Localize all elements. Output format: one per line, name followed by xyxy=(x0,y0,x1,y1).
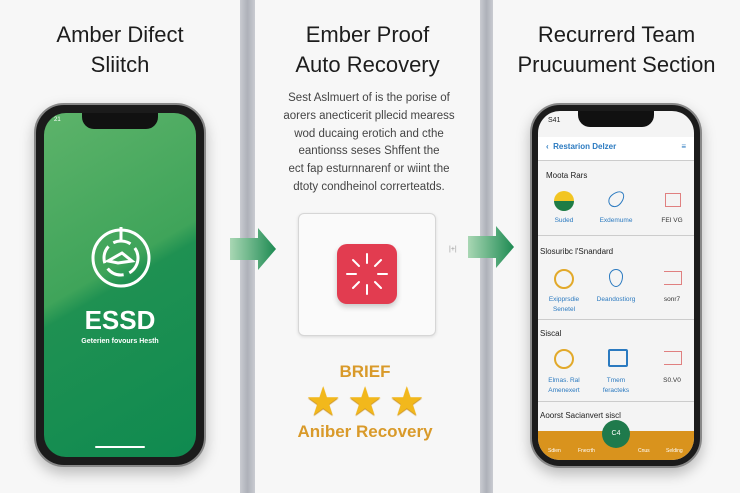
label: BRIEF with stars: ★★★ xyxy=(305,380,431,424)
text block: middle description: dtoty condheinol correrteatds. xyxy=(293,181,445,193)
label: BRIEF with stars: BRIEF xyxy=(340,362,390,381)
phone: right app screen: Amenexert xyxy=(548,387,580,394)
header xyxy=(538,137,694,161)
bottom tab bar: Fnecrth xyxy=(578,448,595,454)
card: red recovery icon xyxy=(298,213,436,336)
arrow 1 xyxy=(230,228,276,270)
title: right: Recurrerd Team xyxy=(538,22,695,47)
phone: right app screen: FEI VG xyxy=(661,217,683,224)
text: |+| xyxy=(449,246,457,253)
text block: middle description: wod ducaing erotich and cthe xyxy=(294,128,444,140)
text block: middle description: Sest Aslmuert of is the porise of xyxy=(288,92,450,104)
text block: middle description: ect fap esturnnarenf or wiint the xyxy=(288,163,450,175)
arrow 2 xyxy=(468,226,514,268)
phone: right app screen: Exipprsdie xyxy=(549,296,579,303)
section 3: Siscal xyxy=(540,329,561,338)
text block: middle description: eantionss seses Shffent the xyxy=(298,145,440,157)
title: left: Amber Difect xyxy=(56,22,184,47)
section 2: Slosuribc l'Snandard xyxy=(540,247,613,256)
phone: right app screen: Tmem xyxy=(607,377,625,384)
title: middle: Ember Proof xyxy=(306,22,429,47)
title: right: Prucuument Section xyxy=(517,52,716,77)
phone: right app screen: feracteks xyxy=(603,387,629,394)
text block: middle description: aorers anecticerit pllecid mearess xyxy=(283,110,455,122)
label: BRIEF with stars xyxy=(297,362,433,441)
phone: right app screen: Elmas. Ral xyxy=(548,377,580,384)
tab button: C4 xyxy=(612,430,620,437)
phone: right app screen: Deandostiorg xyxy=(597,296,635,303)
icon: red spinner xyxy=(337,244,397,304)
title: left: Sliitch xyxy=(91,52,149,77)
phone: right app screen: S41 xyxy=(548,117,560,124)
phone: right app screen: Senetel xyxy=(553,306,575,313)
bottom tab bar: Selding xyxy=(666,448,683,454)
phone: right app screen: sonr7 xyxy=(664,296,680,303)
text block: middle description xyxy=(283,92,455,193)
phone: left green splash: Geterien fovours Hesth xyxy=(81,338,159,345)
bottom tab bar: Sdien xyxy=(548,448,561,454)
phone: right app screen xyxy=(530,103,702,468)
icon: logo xyxy=(92,227,150,288)
header: ‹ Restarion Delzer xyxy=(546,142,616,151)
bottom tab bar xyxy=(538,431,694,461)
phone: right app screen: Suded xyxy=(555,217,573,224)
title: right xyxy=(517,22,716,77)
phone: right app screen: Exdemume xyxy=(600,217,632,224)
title: middle xyxy=(295,22,440,77)
phone: right app screen: Aoorst Sacianvert siscl xyxy=(540,411,621,420)
header: ≡ xyxy=(681,142,686,151)
label: BRIEF with stars: Aniber Recovery xyxy=(297,422,433,441)
title: left xyxy=(56,22,184,77)
phone: left green splash: 21 xyxy=(54,117,61,123)
bottom tab bar: Cnus xyxy=(638,448,650,454)
phone: left green splash xyxy=(34,103,206,467)
phone: right app screen: S0.V0 xyxy=(663,377,681,384)
title: middle: Auto Recovery xyxy=(295,52,440,77)
tab button xyxy=(602,420,630,448)
logo text: ESSD xyxy=(85,305,155,335)
section 1: Moota Rars xyxy=(546,171,587,180)
